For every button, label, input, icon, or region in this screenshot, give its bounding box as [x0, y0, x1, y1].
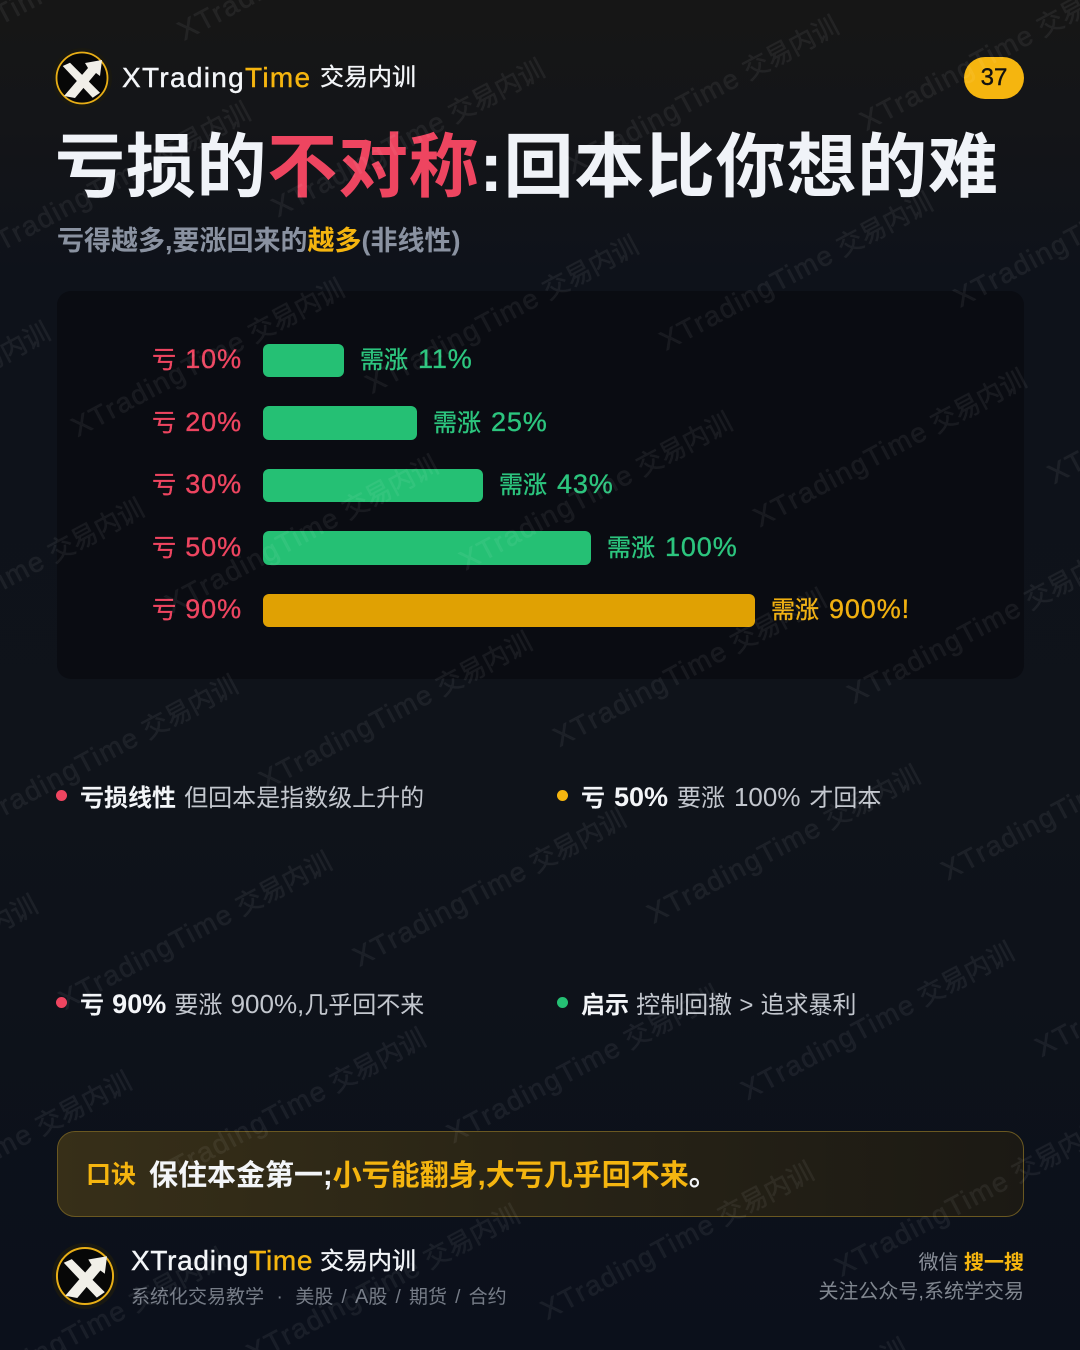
subtitle: 亏得越多,要涨回来的越多(非线性): [57, 226, 460, 256]
header brand name: XTradingTime: [122, 62, 311, 93]
footer brand suffix: 交易内训: [320, 1248, 416, 1275]
bullet: insight: 启示 控制回撤 > 追求暴利: [581, 992, 857, 1019]
bullet: 50% loss: 亏 50% 要涨 100% 才回本: [581, 782, 881, 812]
row: loss 10%: [152, 344, 473, 377]
callout text: 保住本金第一;小亏能翻身,大亏几乎回不来。: [149, 1160, 718, 1192]
row: loss 20%: [152, 406, 548, 440]
header brand suffix: 交易内训: [320, 64, 416, 91]
row: loss 50%: 亏 50%: [152, 532, 242, 562]
page number badge: 37: [981, 64, 1007, 91]
page number badge: [964, 57, 1024, 99]
row: loss 50%: 需涨 100%: [607, 532, 738, 562]
footer logo icon: [52, 1243, 118, 1309]
footer tagline: 系统化交易教学 · 美股 / A股 / 期货 / 合约: [131, 1286, 507, 1308]
row: loss 90%: [152, 594, 910, 627]
row: loss 20%: 需涨 25%: [433, 407, 548, 437]
header logo icon: [56, 52, 108, 104]
panel: bar chart background: [57, 291, 1024, 679]
row: loss 50%: [152, 531, 738, 565]
footer follow note: 关注公众号,系统学交易: [818, 1281, 1024, 1303]
row: loss 30%: 亏 30%: [152, 469, 242, 499]
footer search prompt: 微信 搜一搜: [918, 1252, 1024, 1274]
row: loss 30%: 需涨 43%: [499, 469, 614, 499]
bullet: 90% loss: 亏 90% 要涨 900%,几乎回不来: [80, 989, 424, 1019]
row: loss 30%: [152, 469, 614, 502]
bar chart: [152, 344, 910, 627]
title: 亏损的不对称:回本比你想的难: [55, 128, 999, 206]
callout label: 口诀: [86, 1161, 136, 1189]
row: loss 10%: 亏 10%: [152, 344, 242, 374]
footer brand name: XTradingTime: [131, 1245, 313, 1276]
callout: mantra: [57, 1131, 1024, 1217]
row: loss 90%: 亏 90%: [152, 594, 242, 624]
row: loss 90%: 需涨 900%!: [771, 594, 910, 624]
bullet: loss is linear: 亏损线性 但回本是指数级上升的: [80, 785, 424, 812]
row: loss 10%: 需涨 11%: [360, 344, 473, 374]
row: loss 20%: 亏 20%: [152, 407, 242, 437]
